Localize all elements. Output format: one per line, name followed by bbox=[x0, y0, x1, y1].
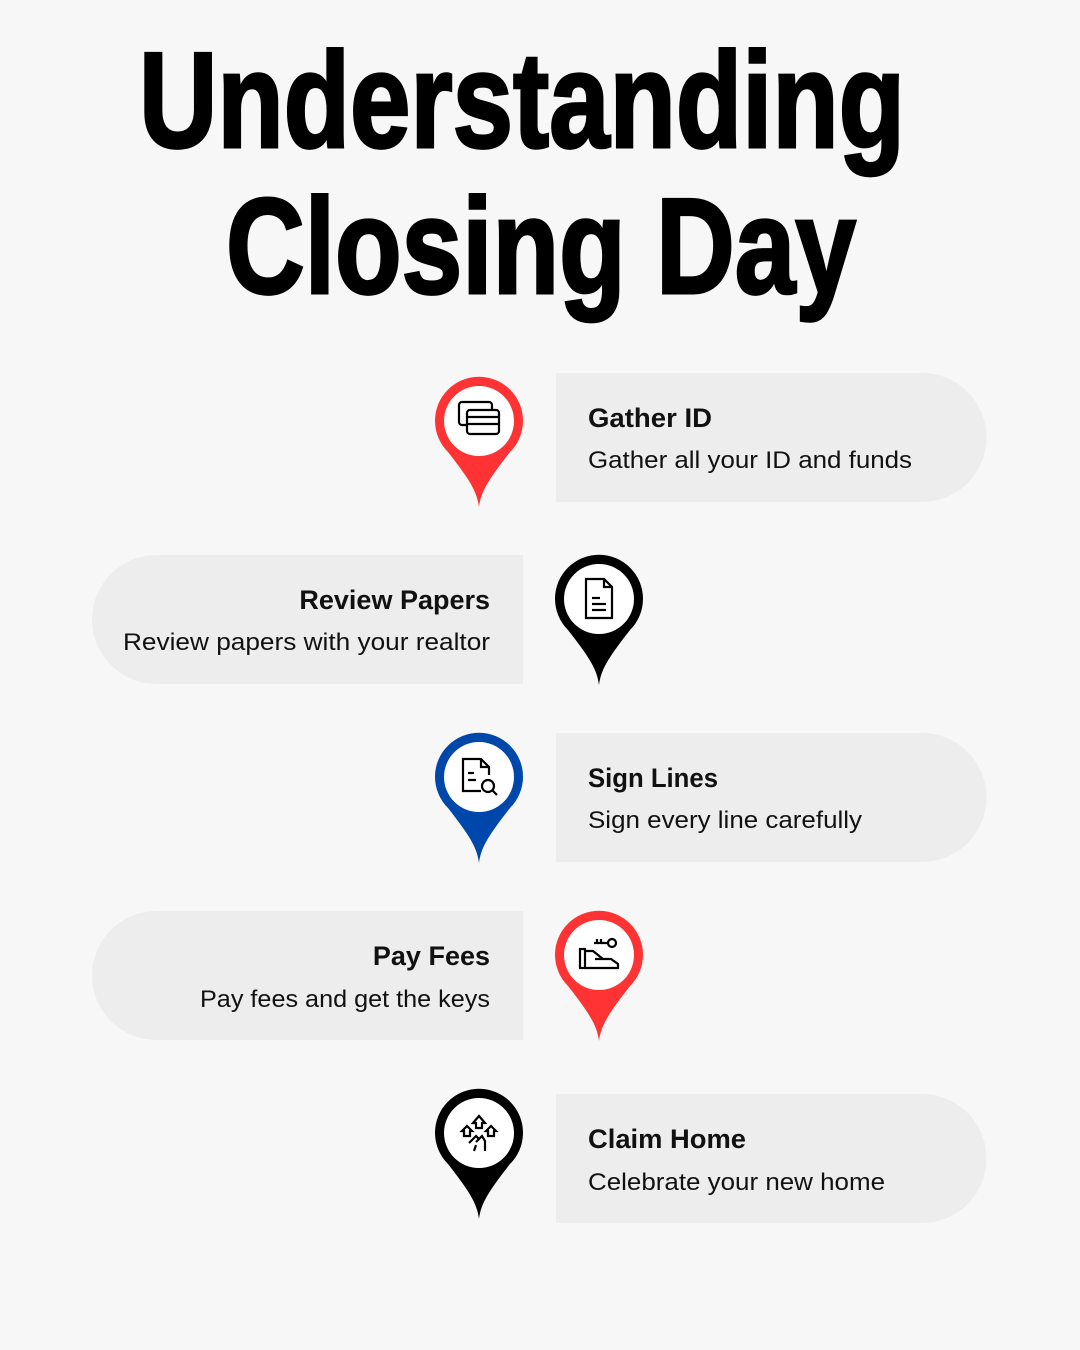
panel: review papers: Review Papers bbox=[299, 585, 490, 615]
step 4: Pay Fees bbox=[92, 911, 643, 1041]
title: Closing Day bbox=[226, 170, 856, 322]
panel: sign lines bbox=[556, 733, 986, 862]
icon: red pin with cards bbox=[435, 377, 523, 507]
step 1: Gather ID bbox=[435, 373, 986, 507]
panel: pay fees bbox=[92, 911, 523, 1040]
panel: pay fees: Pay Fees bbox=[373, 941, 490, 971]
title bbox=[139, 24, 905, 322]
panel: gather id: Gather ID bbox=[588, 403, 712, 433]
panel: claim home: Celebrate your new home bbox=[588, 1169, 885, 1196]
panel: pay fees: Pay fees and get the keys bbox=[200, 986, 490, 1013]
panel: claim home: Claim Home bbox=[588, 1124, 746, 1154]
icon: black pin with houses and hand bbox=[435, 1089, 523, 1219]
step 3: Sign Lines bbox=[435, 733, 986, 863]
panel: gather id: Gather all your ID and funds bbox=[588, 447, 912, 474]
title: Understanding bbox=[139, 24, 905, 176]
panel: claim home bbox=[556, 1094, 986, 1223]
icon: red pin with hand and key bbox=[555, 911, 643, 1041]
panel: sign lines: Sign every line carefully bbox=[588, 807, 862, 834]
panel: review papers bbox=[92, 555, 523, 684]
step 2: Review Papers bbox=[92, 555, 643, 685]
panel: sign lines: Sign Lines bbox=[588, 763, 718, 793]
panel: review papers: Review papers with your realtor bbox=[123, 629, 490, 656]
icon: black pin with document bbox=[555, 555, 643, 685]
panel: gather id bbox=[556, 373, 986, 502]
step 5: Claim Home bbox=[435, 1089, 986, 1223]
icon: blue pin with document search bbox=[435, 733, 523, 863]
